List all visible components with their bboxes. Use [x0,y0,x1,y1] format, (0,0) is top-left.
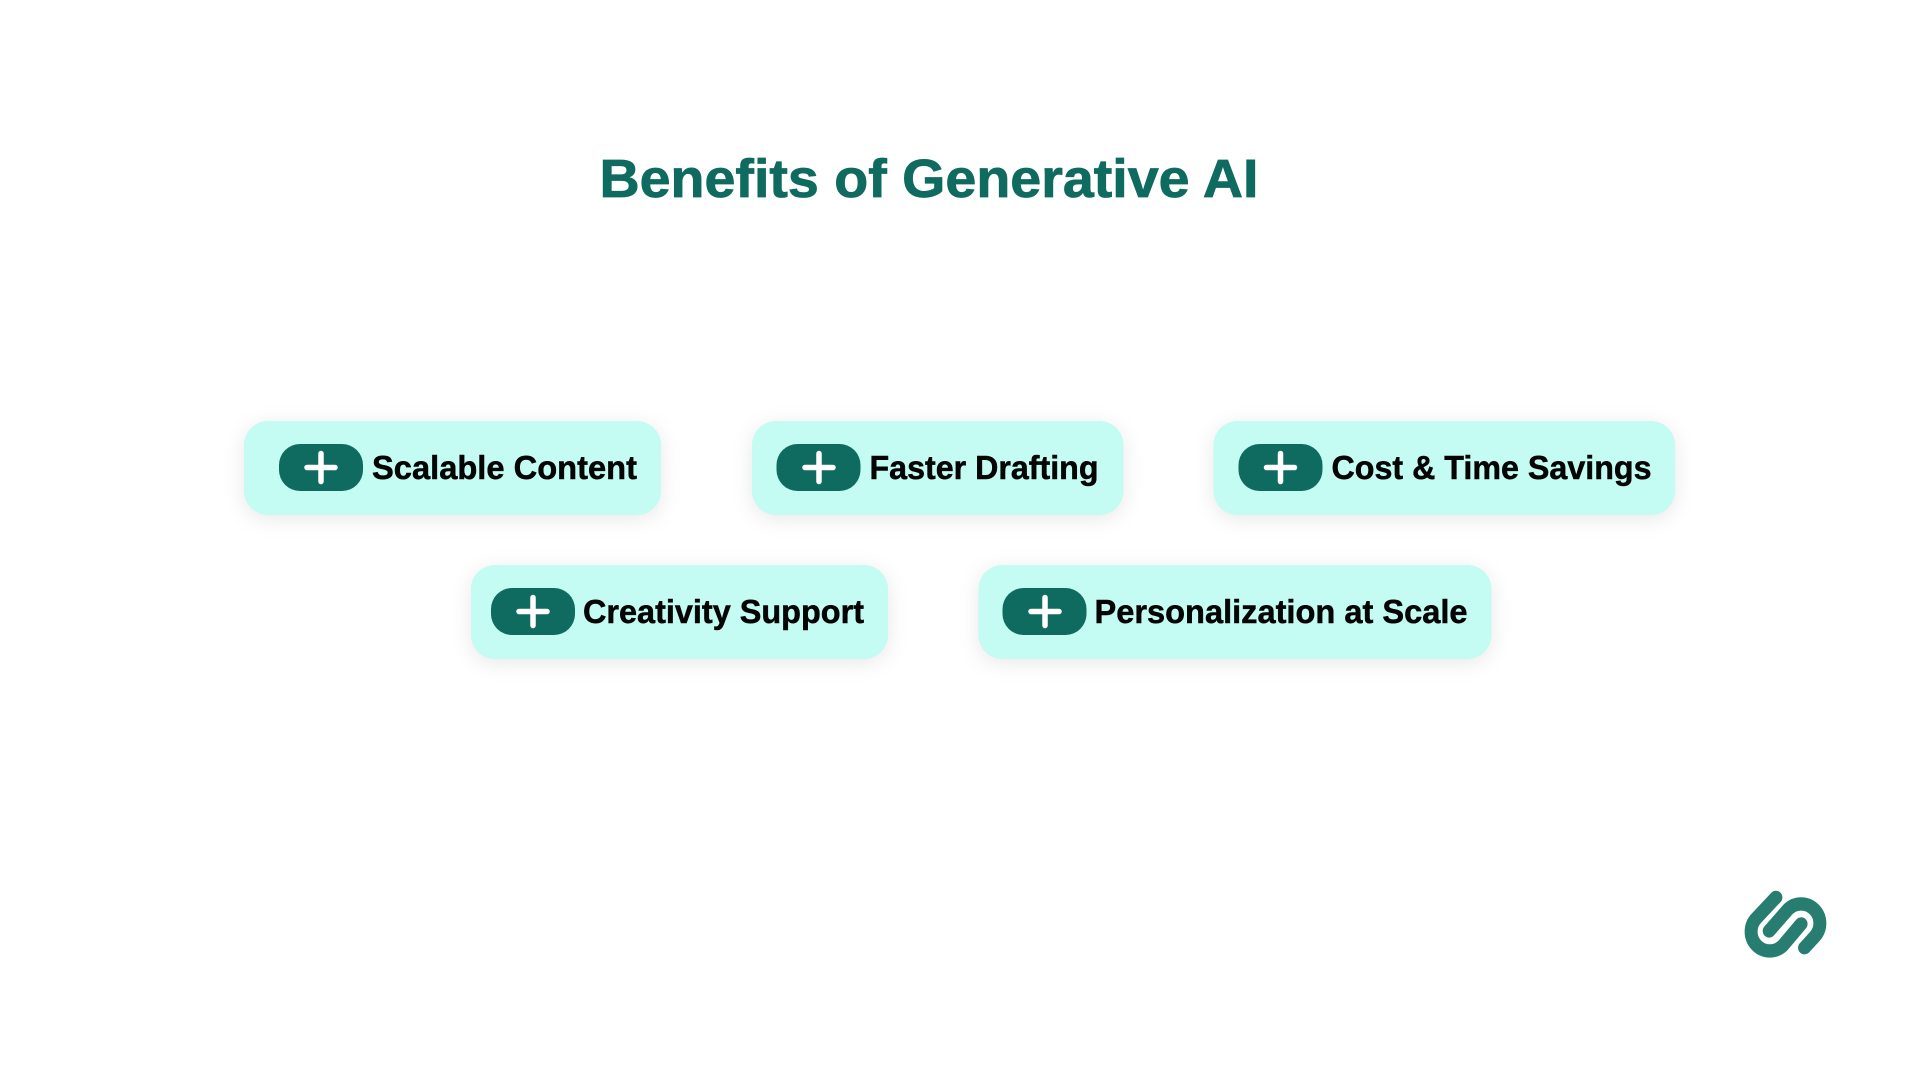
panel: Scalable Content [244,421,661,515]
icon: paperclip logo [1751,897,1820,951]
panel: Scalable Content: Scalable Content [372,449,637,486]
panel: Faster Drafting [752,421,1124,515]
panel: Cost & Time Savings [1214,421,1675,515]
panel: Creativity Support [471,565,888,659]
title: Benefits of Generative AI [600,149,1258,209]
panel: Faster Drafting: Faster Drafting [870,449,1098,486]
panel: Personalization at Scale: Personalization at Scale [1094,593,1468,630]
panel: Creativity Support: Creativity Support [583,593,864,630]
panel: Cost & Time Savings: Cost & Time Savings [1332,449,1652,486]
panel: Personalization at Scale [978,565,1492,659]
